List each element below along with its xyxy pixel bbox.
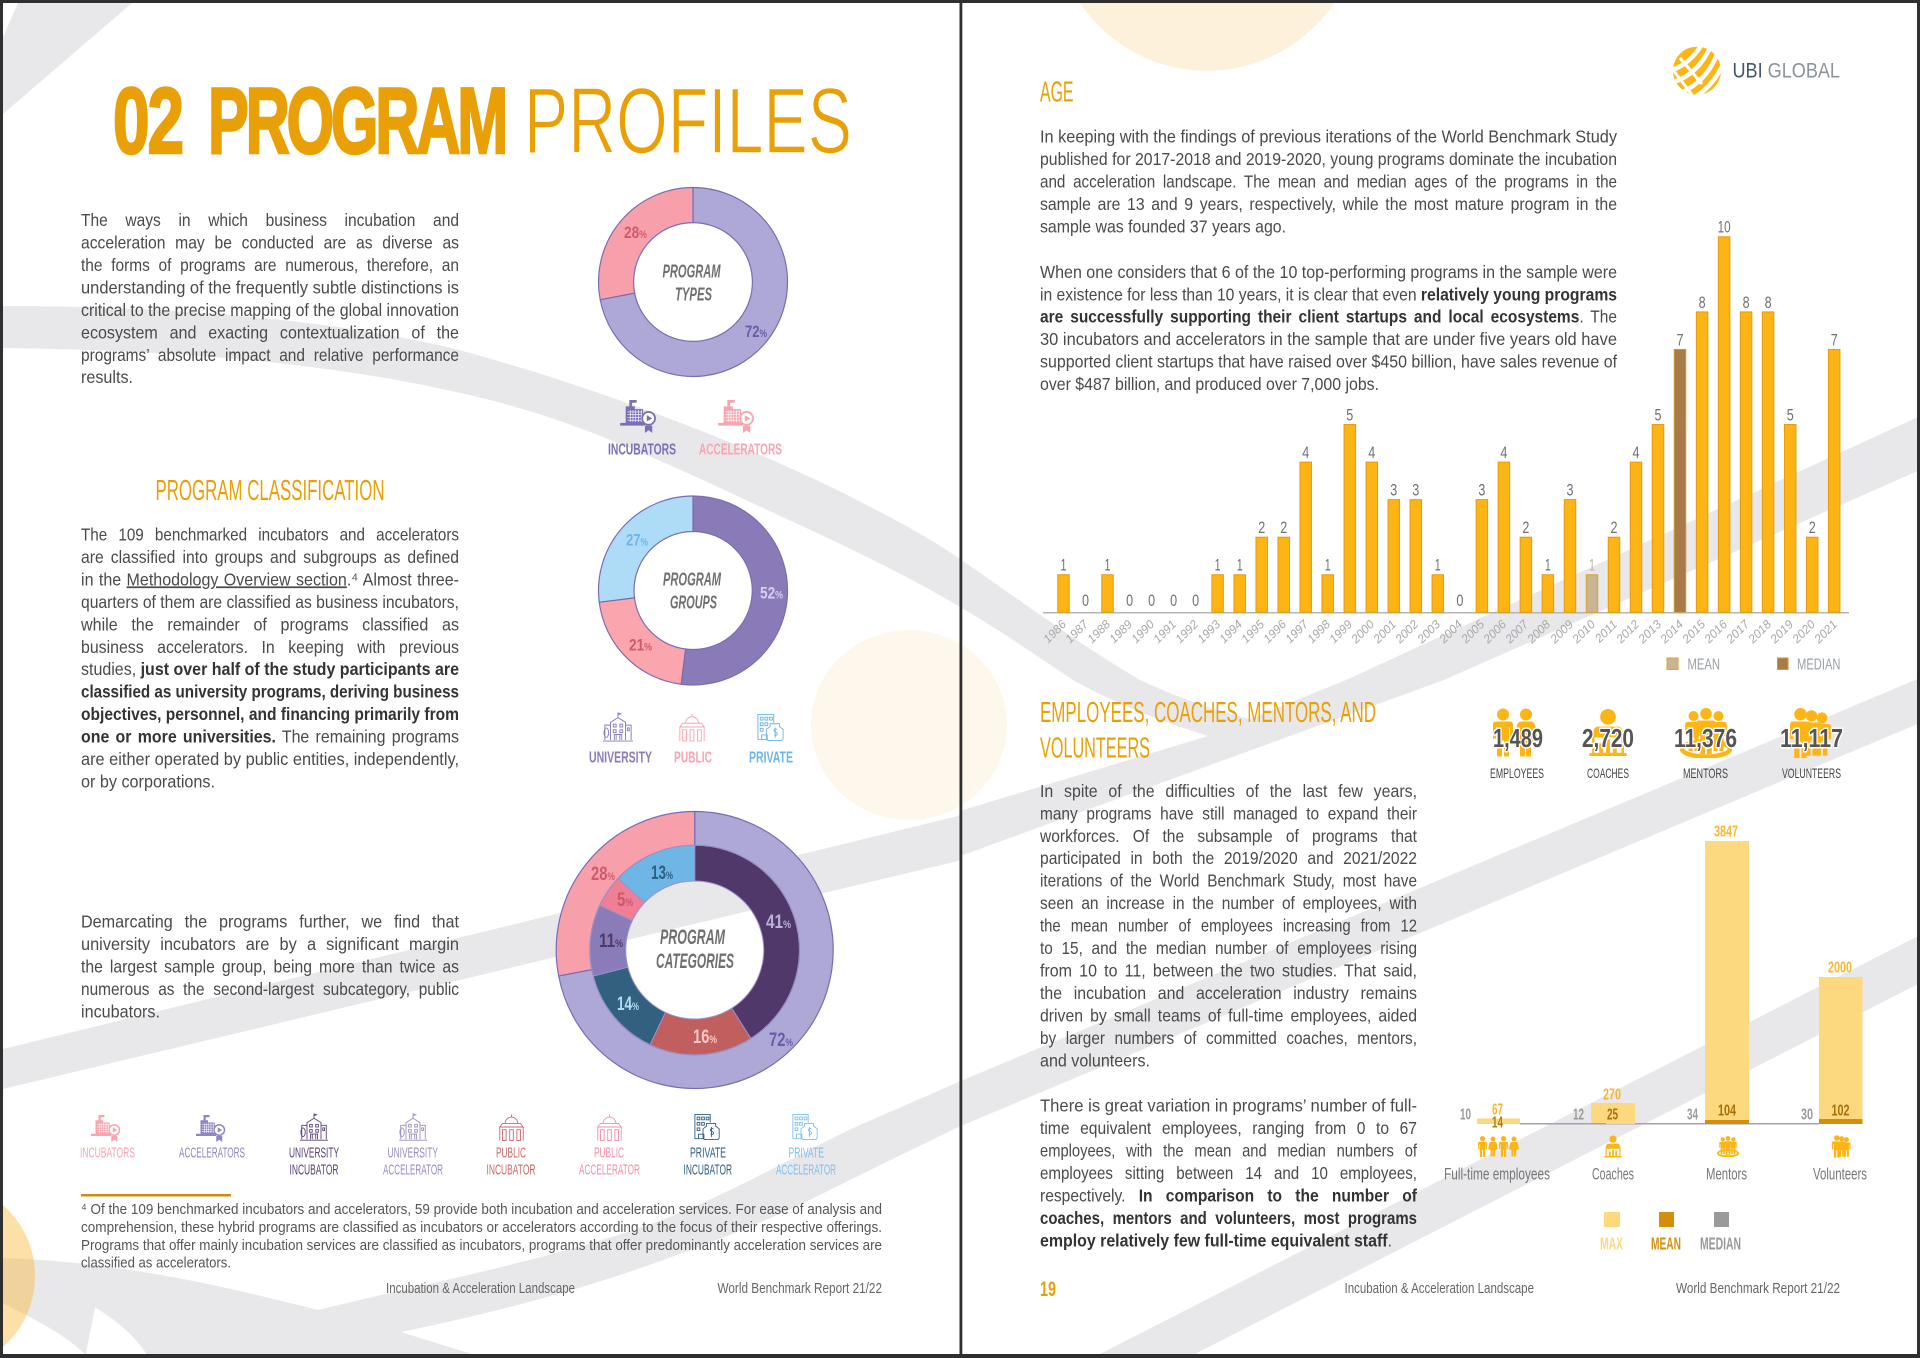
bar value labels: 10 [1718,218,1731,236]
bar value labels: 3 [1412,480,1419,500]
year axis labels: 1997 [1282,616,1312,646]
workforce paragraphs: by larger numbers of committed coaches, mentors, [1040,1028,1417,1048]
category: coaches [1592,1135,1634,1184]
workforce paragraphs: seen an increase in the number of employees, with [1040,893,1417,913]
year axis labels: 2011 [1591,617,1620,646]
age paragraphs: In keeping with the findings of previous iterations of the World Benchmark Study [1040,126,1617,146]
bar value labels: 4 [1302,443,1309,462]
year axis labels: 1993 [1194,617,1223,646]
heading: age: AGE [1040,76,1074,108]
bar value labels: 0 [1170,591,1177,610]
legend: university incubator: UNIVERSITY [289,1144,339,1162]
bar value labels: 1 [1435,556,1441,574]
year axis labels: 2021 [1811,617,1840,647]
bar value labels: 2 [1610,518,1618,537]
intro paragraph: The ways in which business incubation and [81,210,459,230]
bars: coaches: 12 [1573,1106,1584,1124]
bar value labels: 1 [1589,556,1595,574]
bar value labels: 2 [1258,518,1265,537]
classification paragraph: in the Methodology Overview section.⁴ Almost three- [81,569,459,589]
bars: full-time employees: 10 [1460,1106,1471,1124]
bar value labels: 0 [1456,591,1463,610]
workforce paragraphs: driven by small teams of full-time employees, aided [1040,1006,1417,1026]
bars: mentors [1687,824,1749,1124]
bars: full-time employees: 67 [1492,1102,1503,1118]
bar value labels: 0 [1148,591,1155,610]
double donut chart: program categories: 28% [591,864,615,885]
donut chart: program groups: 27% [626,530,648,550]
age paragraphs: 30 incubators and accelerators in the sample that are under five years old have [1040,329,1617,349]
left page footer [386,1281,882,1297]
donut chart: program groups: PROGRAM [663,570,722,590]
category: volunteers [1813,1135,1867,1184]
heading: employees, coaches, mentors and volunteers [1040,697,1376,764]
year axis labels: 2003 [1414,617,1443,647]
double donut chart: program categories: CATEGORIES [656,950,734,973]
bar value labels: 3 [1478,480,1485,500]
title: 02 [113,68,182,173]
double donut chart: program categories: 16% [693,1027,717,1048]
bar value labels: 1 [1060,556,1066,574]
legend: incubators: INCUBATORS [80,1144,135,1162]
staff chart legend [1600,1212,1741,1254]
bars: volunteers [1801,960,1862,1124]
year axis labels: 1987 [1062,616,1092,646]
category: coaches: Coaches [1592,1164,1634,1184]
category: volunteers: Volunteers [1813,1164,1867,1184]
icon and label: accelerators [699,400,782,458]
bars: volunteers: 102 [1832,1102,1850,1120]
intro paragraph: results. [81,367,133,387]
year axis labels: 2008 [1524,617,1553,647]
bars: volunteers: 2000 [1828,960,1852,976]
legend: accelerators: ACCELERATORS [179,1144,245,1162]
classification paragraph: or by corporations. [81,772,215,792]
legend: university incubator [289,1114,339,1178]
workforce paragraphs: coaches, mentors and volunteers, most programs [1040,1208,1417,1228]
bar value labels: 8 [1699,293,1706,312]
workforce paragraphs: many programs have still managed to expand their [1040,804,1417,824]
workforce paragraphs: and volunteers. [1040,1050,1150,1070]
classification paragraph: are either operated by public entities, independently, [81,749,459,769]
age paragraphs: and acceleration landscape. The mean and median ages of the programs in the [1040,172,1617,192]
stat: volunteers: VOLUNTEERS [1782,765,1841,781]
bar value labels: 0 [1082,591,1089,610]
year axis labels: 1990 [1128,617,1157,646]
bars: coaches: 25 [1607,1106,1618,1124]
year axis labels: 2020 [1789,617,1818,647]
categories paragraph: Demarcating the programs further, we find that [81,912,459,932]
donut chart: program types: 28% [624,223,647,242]
workforce paragraphs: In spite of the difficulties of the last few years, [1040,781,1417,801]
legend: public incubator: PUBLIC [496,1144,526,1162]
classification paragraph: quarters of them are classified as business incubators, [81,592,459,612]
double donut chart: program categories: 5% [617,890,633,911]
age paragraphs: sample was founded 37 years ago. [1040,216,1286,236]
classification paragraph [80,524,459,792]
double donut chart: program categories: PROGRAM [660,926,725,949]
intro paragraph: the forms of programs are numerous, therefore, an [81,255,459,275]
categories paragraph: university incubators are by a significant margin [81,934,459,954]
year axis labels: 1995 [1238,617,1267,646]
year axis labels: 1994 [1216,617,1245,646]
stat: coaches: COACHES [1587,765,1629,781]
icon and label: incubators: INCUBATORS [608,442,676,458]
year axis labels: 2017 [1723,616,1753,647]
icon and label: public: PUBLIC [674,750,712,766]
logo: UBI Global: UBI GLOBAL [1732,60,1840,82]
donut chart: program groups: GROUPS [670,592,717,612]
legend: private accelerator [776,1114,836,1178]
donut chart: program types: TYPES [675,284,712,304]
bar value labels: 0 [1192,591,1199,610]
bars: full-time employees [1460,1102,1520,1132]
heading: employees, coaches, mentors and volunteers: VOLUNTEERS [1040,732,1150,764]
year axis labels: 2015 [1679,617,1708,647]
year axis labels: 1998 [1304,617,1333,646]
double donut chart: program categories: 14% [617,994,639,1015]
classification paragraph: objectives, personnel, and financing primarily from [81,704,459,724]
legend: incubators [80,1115,135,1162]
icon and label: private [749,714,793,766]
decorative pale circle centre spread [811,630,1007,820]
age chart legend: MEAN [1688,656,1720,674]
legend: private incubator: PRIVATE [690,1144,726,1162]
legend: private accelerator: PRIVATE [788,1144,824,1162]
workforce paragraphs: time equivalent employees, ranging from 0 to 67 [1040,1118,1417,1138]
workforce paragraphs: iterations of the World Benchmark Study, most have [1040,870,1417,890]
age paragraphs: in existence for less than 10 years, it is clear that even relatively young programs [1040,284,1617,304]
donut chart: program types: 72% [745,322,767,341]
year axis labels: 2004 [1436,617,1465,647]
workforce paragraphs: participated in both the 2019/2020 and 2021/2022 [1040,848,1417,868]
donut chart: program groups: 52% [760,584,783,602]
workforce paragraphs: employees, with the mean and median numbers of [1040,1140,1417,1160]
icon and label: incubators [608,400,676,458]
bar value labels: 5 [1654,406,1662,424]
age bars [1058,237,1840,612]
age paragraphs: published for 2017-2018 and 2019-2020, young programs dominate the incubation [1040,149,1617,169]
bar value labels: 1 [1545,556,1551,574]
page number: 19 [1040,1278,1056,1301]
classification paragraph: while the remainder of programs classified as [80,614,459,634]
classification paragraph: one or more universities. The remaining programs [81,727,459,747]
bar value labels: 2 [1522,518,1529,537]
bar value labels: 0 [1126,591,1133,610]
stat: employees: 1,489 [1493,723,1543,753]
heading: program classification: PROGRAM CLASSIFICATION [156,475,384,507]
categories paragraph: the largest sample group, being more than twice as [81,956,459,976]
bars: full-time employees: 14 [1492,1114,1503,1132]
year axis labels: 2018 [1745,617,1774,647]
workforce paragraphs: workforces. Of the subsample of programs that [1039,826,1417,846]
year axis labels: 1989 [1106,617,1135,646]
legend: public accelerator: ACCELERATOR [579,1162,640,1178]
workforce paragraphs [1039,781,1417,1250]
workforce paragraphs: the incubation and acceleration industry remains [1040,983,1417,1003]
left page footer: Incubation & Acceleration Landscape [386,1281,575,1297]
year axis labels: 2016 [1701,617,1730,647]
logo: UBI Global [1673,46,1840,95]
year axis labels: 2001 [1370,617,1399,647]
legend: private incubator [684,1114,732,1178]
year axis labels: 1999 [1326,617,1355,646]
decorative pale circle top right page [1054,0,1360,71]
classification paragraph: The 109 benchmarked incubators and accelerators [81,524,459,544]
year axis labels: 2009 [1547,617,1576,647]
stat: mentors: 11,376 [1674,723,1737,753]
left page footer: World Benchmark Report 21/22 [718,1281,882,1297]
stat: volunteers [1780,708,1843,781]
title: PROFILES [524,68,852,173]
bar chart: program founding year [1040,218,1849,674]
legend: private incubator: INCUBATOR [684,1162,732,1178]
year axis labels: 2010 [1569,617,1598,647]
age paragraphs: sample are 13 and 9 years, respectively, while the most mature program in the [1040,194,1617,214]
bar value labels: 4 [1500,443,1507,462]
categories paragraph [81,912,459,1021]
heading: employees, coaches, mentors and volunteers: EMPLOYEES, COACHES, MENTORS, AND [1040,697,1376,729]
donut chart: program types: PROGRAM [662,262,721,282]
double donut chart: program categories: 41% [766,912,791,933]
legend: public accelerator [579,1114,640,1178]
bar value labels: 7 [1831,330,1838,350]
right page footer: World Benchmark Report 21/22 [1676,1281,1840,1297]
legend: public accelerator: PUBLIC [594,1144,624,1162]
stat: employees [1490,708,1544,781]
stat: coaches: 2,720 [1582,723,1634,753]
category: mentors [1706,1136,1747,1184]
bar value labels: 2 [1280,518,1287,537]
right page footer [1344,1281,1840,1297]
bars: coaches [1573,1086,1635,1124]
year axis labels: 1996 [1260,617,1289,646]
workforce paragraphs: the mean number of employees increasing from 12 [1040,916,1417,936]
classification paragraph: studies, just over half of the study participants are [81,659,459,679]
year axis labels: 2012 [1613,617,1642,647]
legend: accelerators [179,1115,245,1162]
year axis labels: 2002 [1392,617,1421,647]
age paragraphs: supported client startups that have raised over $450 billion, have sales revenue of [1040,352,1617,372]
bar value labels: 8 [1743,293,1750,312]
age chart legend [1667,656,1840,674]
bars: mentors: 34 [1687,1106,1698,1124]
categories paragraph: incubators. [81,1001,160,1021]
year axis labels: 1986 [1040,617,1069,646]
intro paragraph: programs’ absolute impact and relative performance [81,345,459,365]
title [113,68,852,173]
footnote rule and text: Programs that offer mainly incubation services are classified as incubators, programs that offer predominantly acceleration services are [81,1237,882,1254]
footnote rule and text [81,1194,882,1272]
year axis labels: 2006 [1480,617,1509,647]
stat: mentors [1674,708,1737,781]
legend: public incubator: INCUBATOR [486,1162,536,1178]
workforce paragraphs: from 10 to 11, between the two studies. That said, [1040,960,1417,980]
stat: mentors: MENTORS [1683,765,1728,781]
icon and label: private: PRIVATE [749,750,793,766]
intro paragraph: critical to the precise mapping of the global innovation [81,300,459,320]
chart axis [1043,612,1849,614]
bar value labels: 1 [1325,556,1331,574]
year axis labels: 2005 [1458,617,1487,647]
categories paragraph: numerous as the second-largest subcategory, public [81,979,459,999]
category: full-time employees: Full-time employees [1444,1164,1550,1184]
bar value labels: 3 [1566,480,1574,500]
bars: coaches: 270 [1603,1086,1621,1104]
bar value labels: 8 [1765,293,1772,312]
footnote rule and text: comprehension, these hybrid programs are classified as incubators or accelerators according to the focus of their respective offerings. [81,1219,882,1236]
legend: university accelerator: ACCELERATOR [383,1162,443,1178]
icon and label: university [589,713,652,766]
year axis labels: 2014 [1657,617,1686,647]
bar value labels: 5 [1787,406,1794,424]
year axis labels: 2000 [1348,617,1377,647]
bars: volunteers: 30 [1801,1106,1813,1124]
age chart legend: MEDIAN [1797,656,1840,674]
workforce paragraphs: employees sitting between 14 and 10 employees, [1040,1163,1417,1183]
year axis labels: 1988 [1084,617,1113,646]
stat: employees: EMPLOYEES [1490,765,1544,781]
age paragraphs: are successfully supporting their client startups and local ecosystems. The [1040,307,1617,327]
bar value labels: 2 [1809,518,1816,537]
footnote rule and text: classified as accelerators. [81,1254,231,1272]
age paragraphs: When one considers that 6 of the 10 top-performing programs in the sample were [1040,262,1617,282]
title: PROGRAM [208,68,505,173]
year axis labels: 1991 [1150,617,1179,646]
footnote rule and text: ⁴ Of the 109 benchmarked incubators and accelerators, 59 provide both incubation and acceleration services. For ease of analysis and [81,1201,882,1218]
double donut chart: program categories: 72% [769,1030,793,1051]
bar value labels: 1 [1104,556,1110,574]
year axis labels [1040,616,1840,647]
stat: volunteers: 11,117 [1780,723,1843,753]
classification paragraph: classified as university programs, deriving business [81,682,459,702]
decorative orange circle bottom left [0,1181,35,1358]
workforce paragraphs: to 15, and the median number of employees rising [1040,938,1417,958]
intro paragraph: acceleration may be conducted are as diverse as [81,232,459,252]
legend: public incubator [486,1114,536,1178]
bar chart: max, mean, median of staff [1444,824,1867,1254]
bar value labels: 1 [1215,556,1221,574]
year axis labels: 2019 [1767,617,1796,647]
year axis labels: 2007 [1502,616,1532,647]
age paragraphs: over $487 billion, and produced over 7,000 jobs. [1040,374,1379,394]
bar value labels: 1 [1237,556,1243,574]
legend: university accelerator [383,1114,443,1178]
double donut chart: program categories: 13% [651,863,673,884]
icon and label: accelerators: ACCELERATORS [699,442,782,458]
classification paragraph: are classified into groups and subgroups as defined [81,547,459,567]
double donut chart: program categories: 11% [599,931,623,952]
age paragraphs [1040,126,1617,394]
chart baseline [1520,1123,1819,1124]
stat: coaches [1582,709,1634,781]
right page footer: Incubation & Acceleration Landscape [1344,1281,1534,1297]
legend: private accelerator: ACCELERATOR [776,1162,836,1178]
classification paragraph: business accelerators. In keeping with previous [81,637,459,657]
icon and label: public [674,714,712,766]
bars: mentors: 3847 [1714,824,1738,840]
workforce paragraphs: respectively. In comparison to the number of [1040,1186,1417,1206]
workforce paragraphs: employ relatively few full-time equivalent staff. [1040,1230,1392,1250]
bar value labels: 4 [1632,443,1640,462]
year axis labels: 1992 [1172,617,1201,646]
bar value labels [1060,218,1838,610]
icon and label: university: UNIVERSITY [589,750,652,766]
donut chart: program types [599,188,788,376]
category: full-time employees [1444,1136,1550,1184]
bar value labels: 4 [1368,443,1375,462]
donut chart: program groups: 21% [629,636,652,654]
bar value labels: 5 [1346,406,1353,424]
double donut chart: program categories [556,812,833,1088]
legend: university accelerator: UNIVERSITY [388,1144,438,1162]
bar value labels: 7 [1676,330,1684,350]
category: mentors: Mentors [1706,1164,1747,1184]
legend: university incubator: INCUBATOR [290,1162,339,1178]
donut chart: program groups [599,496,788,685]
intro paragraph [81,210,459,387]
intro paragraph: understanding of the frequently subtle distinctions is [81,277,459,297]
staff chart legend: MAX [1600,1234,1623,1254]
workforce paragraphs: There is great variation in programs’ number of full- [1040,1096,1417,1116]
year axis labels: 2013 [1635,617,1664,647]
bars: mentors: 104 [1718,1102,1736,1120]
staff chart legend: MEDIAN [1700,1234,1741,1254]
intro paragraph: ecosystem and exacting contextualization of the [81,322,459,342]
staff chart legend: MEAN [1651,1234,1681,1254]
bar value labels: 3 [1390,480,1397,500]
